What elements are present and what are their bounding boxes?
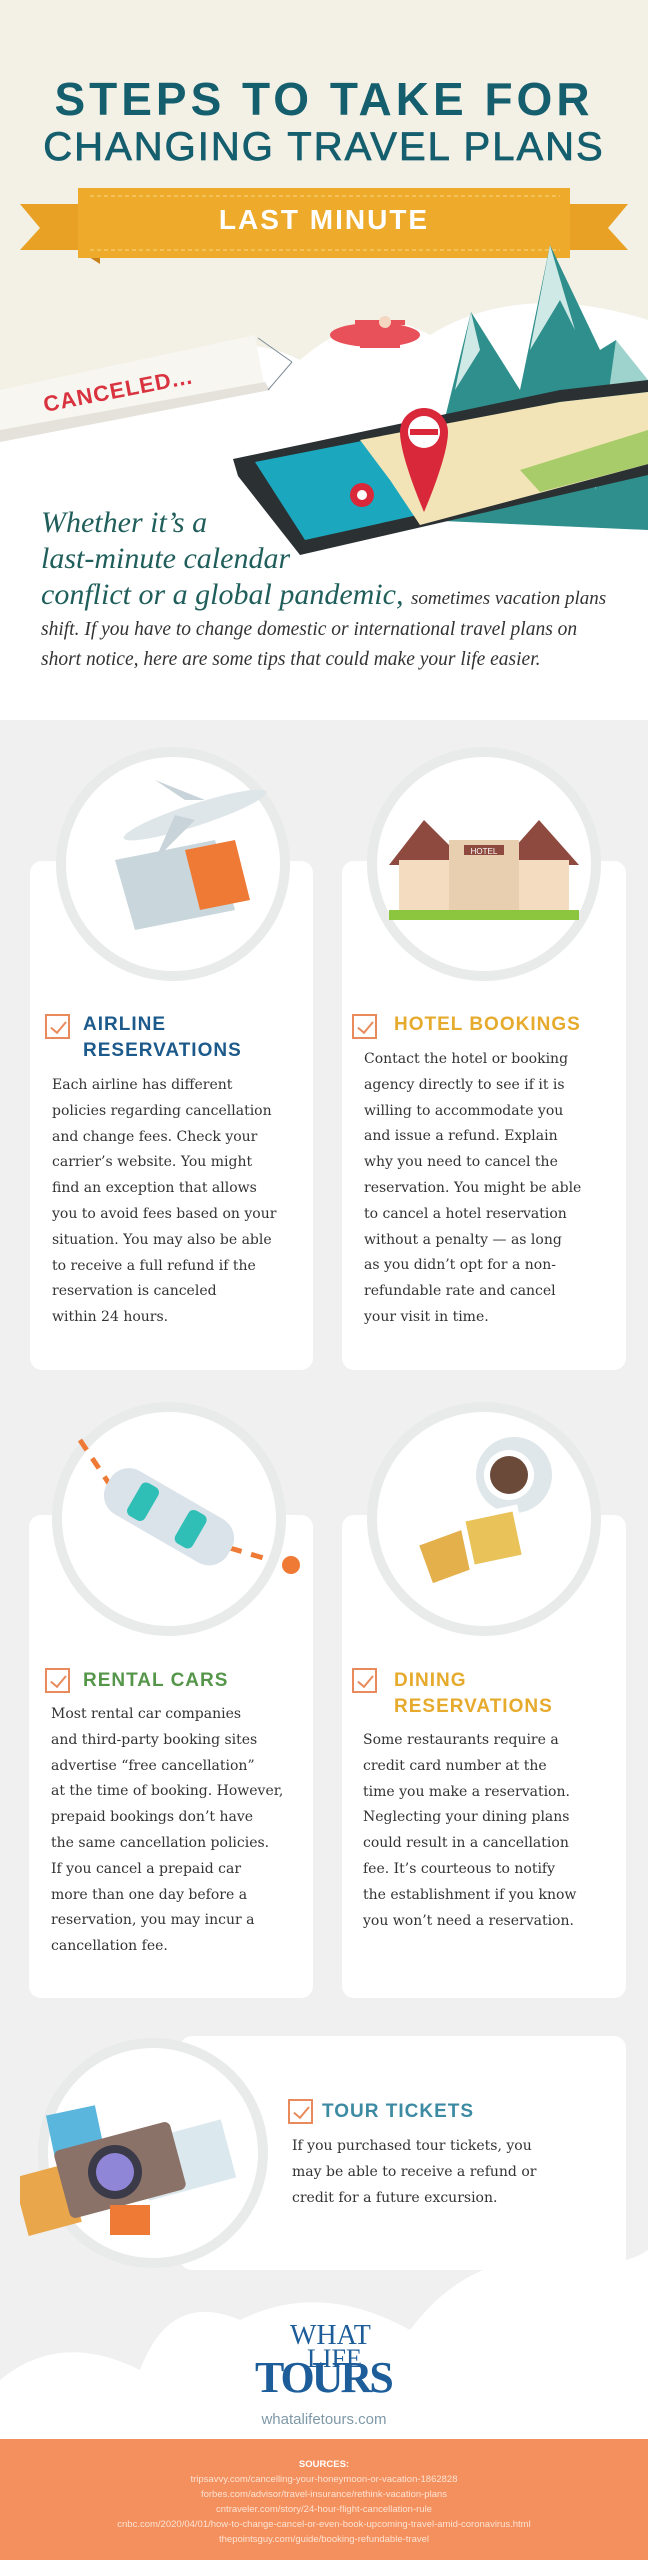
footer clouds xyxy=(0,2250,648,2439)
heading: AIRLINE xyxy=(83,1014,166,1035)
body text: willing to accommodate you xyxy=(364,1103,563,1119)
body text xyxy=(52,1077,276,1325)
body text: policies regarding cancellation xyxy=(52,1103,272,1119)
intro text: conflict or a global pandemic, sometimes vacation plans xyxy=(41,578,606,611)
heading: TOUR TICKETS xyxy=(322,2101,474,2122)
icon: hotel xyxy=(389,820,579,920)
intro text xyxy=(41,506,606,611)
website: whatalifetours.com xyxy=(261,2411,387,2428)
body text: carrier’s website. You might xyxy=(52,1154,252,1170)
logo: TOURS xyxy=(255,2353,391,2402)
body text: reservation, you may incur a xyxy=(51,1912,254,1928)
body text: reservation is canceled xyxy=(52,1283,217,1299)
body text: If you purchased tour tickets, you xyxy=(292,2138,532,2154)
icon: camera and tickets xyxy=(20,2105,236,2236)
body text: Most rental car companies xyxy=(51,1706,241,1722)
banner: last minute xyxy=(20,188,628,264)
panel: dining reservations xyxy=(342,1412,626,1998)
text: CHANGING TRAVEL PLANS xyxy=(43,125,605,169)
body text: If you cancel a prepaid car xyxy=(51,1861,241,1877)
text: short notice, here are some tips that could make your life easier. xyxy=(41,649,541,670)
icon: plane and tickets xyxy=(115,780,266,930)
body text: could result in a cancellation xyxy=(363,1835,569,1851)
logo xyxy=(255,2320,392,2402)
body text: within 24 hours. xyxy=(52,1309,168,1325)
footer: sources: cnbc.com/2020/04/01/how-to-change-cancel-or-even-book-upcoming-travel-amid-coronavirus.html xyxy=(117,2519,531,2530)
body text: and issue a refund. Explain xyxy=(364,1128,558,1144)
intro text: Whether it’s a xyxy=(41,506,207,539)
footer: sources: forbes.com/advisor/travel-insurance/rethink-vacation-plans xyxy=(201,2489,447,2500)
checkbox xyxy=(45,1014,70,1039)
banner: last minute: LAST MINUTE xyxy=(219,204,429,235)
body text: why you need to cancel the xyxy=(364,1154,558,1170)
tablet xyxy=(233,380,648,555)
body text: may be able to receive a refund or xyxy=(292,2164,536,2180)
icon: coffee and photos xyxy=(419,1437,552,1584)
body text: you to avoid fees based on your xyxy=(52,1206,276,1222)
heading: HOTEL BOOKINGS xyxy=(394,1014,581,1035)
body text xyxy=(51,1706,283,1954)
body text: refundable rate and cancel xyxy=(364,1283,556,1299)
body text: Contact the hotel or booking xyxy=(364,1051,568,1067)
body text: agency directly to see if it is xyxy=(364,1077,565,1093)
body text: the establishment if you know xyxy=(363,1887,576,1903)
body text: more than one day before a xyxy=(51,1887,247,1903)
body text: situation. You may also be able xyxy=(52,1232,272,1248)
title: STEPS TO TAKE FOR xyxy=(54,73,594,125)
body text: Each airline has different xyxy=(52,1077,232,1093)
panel: airline reservations xyxy=(30,757,313,1370)
hero illustration xyxy=(0,245,648,555)
body text: advertise “free cancellation” xyxy=(51,1758,255,1774)
panel: rental cars xyxy=(29,1412,313,1998)
body text: time you make a reservation. xyxy=(363,1784,570,1800)
logo: LIFE xyxy=(307,2344,362,2373)
banner strip xyxy=(0,335,265,440)
body text: you won’t need a reservation. xyxy=(363,1913,574,1929)
hero illustration: CANCELED... xyxy=(41,363,195,417)
footer: sources: cntraveler.com/story/24-hour-flight-cancellation-rule xyxy=(216,2504,432,2515)
top background xyxy=(0,0,648,718)
body text: reservation. You might be able xyxy=(364,1180,581,1196)
plane xyxy=(330,316,420,348)
text: shift. If you have to change domestic or international travel plans on xyxy=(41,619,577,640)
white clouds backdrop xyxy=(0,304,648,720)
body text: cancellation fee. xyxy=(51,1938,168,1954)
logo: WHAT xyxy=(290,2320,371,2351)
body text: Some restaurants require a xyxy=(363,1732,559,1748)
heading: DINING xyxy=(394,1670,466,1691)
panel: hotel bookings xyxy=(342,757,626,1370)
intro text: last-minute calendar xyxy=(41,542,290,575)
body text: and third-party booking sites xyxy=(51,1732,257,1748)
heading xyxy=(83,1014,242,1061)
heading: RENTAL CARS xyxy=(83,1670,228,1691)
body text: to receive a full refund if the xyxy=(52,1258,256,1274)
body text: credit card number at the xyxy=(363,1758,547,1774)
body text: credit for a future excursion. xyxy=(292,2190,497,2206)
body text: and change fees. Check your xyxy=(52,1129,257,1145)
panel: tour tickets xyxy=(20,2036,626,2270)
mountains xyxy=(420,245,648,530)
icon: hotel: HOTEL xyxy=(471,847,498,856)
body text: at the time of booking. However, xyxy=(51,1783,283,1799)
body text: fee. It’s courteous to notify xyxy=(363,1861,555,1877)
body text: without a penalty — as long xyxy=(364,1232,562,1248)
footer: sources: tripsavvy.com/cancelling-your-honeymoon-or-vacation-1862828 xyxy=(190,2474,458,2485)
body text xyxy=(362,1732,576,1929)
body text: prepaid bookings don’t have xyxy=(51,1809,253,1825)
footer: sources xyxy=(0,2439,648,2560)
footer: sources: SOURCES: xyxy=(299,2459,349,2470)
icon: car route xyxy=(78,1438,300,1574)
body text xyxy=(364,1051,581,1325)
body text: Neglecting your dining plans xyxy=(363,1809,569,1825)
body text: as you didn’t opt for a non- xyxy=(364,1257,556,1273)
body text: find an exception that allows xyxy=(52,1180,257,1196)
body text: the same cancellation policies. xyxy=(51,1835,269,1851)
body text: your visit in time. xyxy=(364,1309,489,1325)
body text: to cancel a hotel reservation xyxy=(364,1206,567,1222)
heading xyxy=(394,1670,553,1717)
heading: RESERVATIONS xyxy=(394,1696,553,1717)
pin xyxy=(400,408,448,512)
footer: sources: thepointsguy.com/guide/booking-refundable-travel xyxy=(219,2534,429,2545)
heading: RESERVATIONS xyxy=(83,1040,242,1061)
body text xyxy=(292,2138,536,2206)
